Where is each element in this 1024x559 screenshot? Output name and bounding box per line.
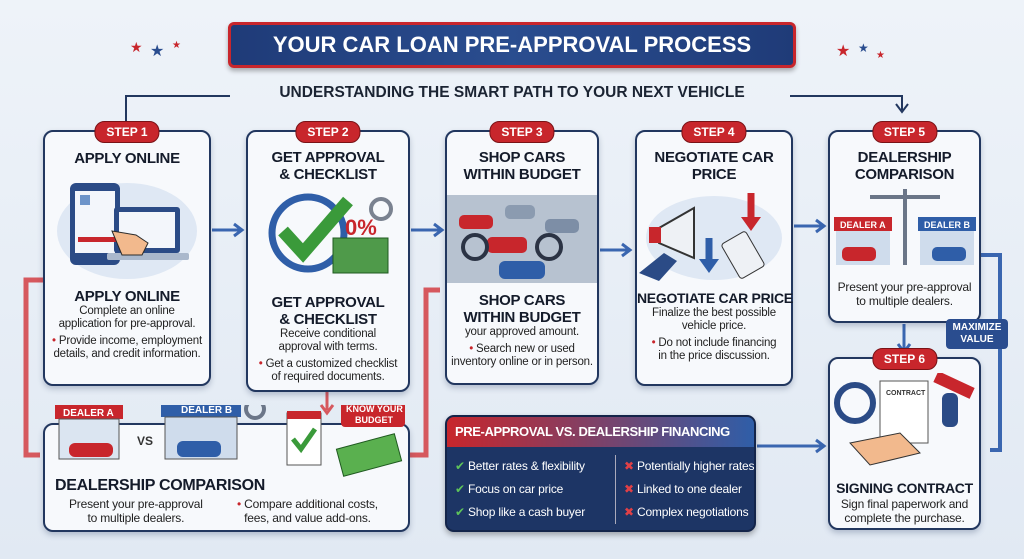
card: step 2: GET APPROVAL xyxy=(271,149,385,166)
card: step 1 xyxy=(43,130,211,386)
panel: dealership comparison bottom: Present your pre-approval xyxy=(69,497,203,511)
card: step 2: STEP 2 xyxy=(307,125,349,139)
card: step 3: your approved amount. xyxy=(465,326,579,338)
card: step 4: in the price discussion. xyxy=(658,350,770,362)
heading: PRE-APPROVAL VS. DEALERSHIP FINANCING xyxy=(455,424,730,439)
icon: car lot xyxy=(447,195,597,283)
card: step 6: Sign final paperwork and xyxy=(841,497,968,511)
card: step 4: NEGOTIATE CAR PRICE xyxy=(637,290,793,306)
decorative stars: ★ xyxy=(172,40,181,51)
title banner: YOUR CAR LOAN PRE-APPROVAL PROCESS xyxy=(273,32,751,57)
icon: checklist and cash: BUDGET xyxy=(355,415,394,425)
card: step 5: DEALERSHIP xyxy=(858,149,951,166)
card: step 5: COMPARISON xyxy=(855,166,954,183)
card: step 4: Finalize the best possible xyxy=(652,307,776,319)
card: step 2: approval with terms. xyxy=(279,341,377,353)
icon: checklist and cash xyxy=(286,405,405,477)
panel: dealership comparison bottom: fees, and value add-ons. xyxy=(244,511,371,525)
card: step 4: • Do not include financing xyxy=(652,337,776,349)
icon: scale and dealers: DEALER B xyxy=(924,220,971,230)
card: step 1: APPLY ONLINE xyxy=(74,288,180,305)
card: step 5: to multiple dealers. xyxy=(856,294,953,308)
decorative stars: ★ xyxy=(150,43,164,60)
card: step 1: Complete an online xyxy=(79,305,175,317)
callout: maximize value: VALUE xyxy=(960,334,994,345)
card: step 4: vehicle price. xyxy=(682,320,746,332)
card: step 3 xyxy=(445,130,599,385)
icon: dealers vs xyxy=(55,405,266,460)
card: step 1: APPLY ONLINE xyxy=(74,150,180,167)
card: step 2: & CHECKLIST xyxy=(279,311,377,328)
card: step 3: SHOP CARS xyxy=(479,149,565,166)
icon: contract handshake xyxy=(834,373,975,466)
list: pros: ✔ Shop like a cash buyer xyxy=(455,505,585,519)
icon: dealers vs: VS xyxy=(137,434,153,448)
panel: dealership comparison bottom: DEALERSHIP COMPARISON xyxy=(55,477,265,494)
card: step 1: STEP 1 xyxy=(106,125,148,139)
panel: dealership comparison bottom xyxy=(43,423,410,532)
icon: dealers vs: DEALER B xyxy=(181,405,232,416)
card: step 3: WITHIN BUDGET xyxy=(464,166,580,183)
card: step 6: STEP 6 xyxy=(884,352,925,366)
card: step 3: inventory online or in person. xyxy=(451,356,593,368)
list: cons: ✖ Linked to one dealer xyxy=(624,482,742,496)
card: step 5 xyxy=(828,130,981,323)
decorative stars: ★ xyxy=(858,41,869,55)
icon: contract handshake: CONTRACT xyxy=(886,390,926,397)
card: step 2: Receive conditional xyxy=(280,328,376,340)
card: step 3: • Search new or used xyxy=(469,343,575,355)
card: step 3: WITHIN BUDGET xyxy=(464,309,580,326)
icon: scale and dealers: DEALER A xyxy=(840,220,886,230)
card: step 2: GET APPROVAL xyxy=(271,294,385,311)
title banner xyxy=(228,22,796,68)
card: step 2 xyxy=(246,130,410,392)
decorative stars: ★ xyxy=(876,50,885,61)
card: step 2: & CHECKLIST xyxy=(279,166,377,183)
panel: pre-approval vs dealership financing xyxy=(445,415,756,532)
card: step 1: details, and credit information. xyxy=(53,348,200,360)
callout: maximize value: MAXIMIZE xyxy=(953,322,1001,333)
list: pros: ✔ Focus on car price xyxy=(455,482,563,496)
card: step 1: • Provide income, employment xyxy=(52,335,202,347)
card: step 5: Present your pre-approval xyxy=(838,280,971,294)
card: step 4: PRICE xyxy=(692,166,736,183)
card: step 2: of required documents. xyxy=(271,371,385,383)
panel: dealership comparison bottom: to multiple dealers. xyxy=(88,511,184,525)
subtitle: UNDERSTANDING THE SMART PATH TO YOUR NEXT VEHICLE xyxy=(279,84,745,101)
icon: devices xyxy=(57,183,197,279)
icon: checkmark and money xyxy=(268,194,393,274)
list: pros: ✔ Better rates & flexibility xyxy=(455,459,585,473)
list: cons: ✖ Potentially higher rates xyxy=(624,459,754,473)
card: step 6 xyxy=(828,357,981,530)
icon: megaphone and price tag xyxy=(639,193,782,281)
card: step 4: NEGOTIATE CAR xyxy=(654,149,774,166)
callout: maximize value xyxy=(946,319,1008,349)
icon: dealers vs: DEALER A xyxy=(63,408,114,419)
heading xyxy=(447,417,754,447)
list: cons xyxy=(615,455,754,524)
decorative stars: ★ xyxy=(836,43,850,60)
card: step 2: • Get a customized checklist xyxy=(259,358,397,370)
card: step 3: STEP 3 xyxy=(501,125,543,139)
icon: scale and dealers xyxy=(834,189,976,265)
icon: checkmark and money: 0% xyxy=(345,215,377,240)
card: step 3: SHOP CARS xyxy=(479,292,565,309)
list: cons: ✖ Complex negotiations xyxy=(624,505,748,519)
card: step 6: SIGNING CONTRACT xyxy=(836,480,973,496)
card: step 6: complete the purchase. xyxy=(844,511,965,525)
card: step 4: STEP 4 xyxy=(693,125,735,139)
decorative stars: ★ xyxy=(130,39,143,55)
list: pros xyxy=(455,459,586,519)
card: step 1: application for pre-approval. xyxy=(59,318,195,330)
card: step 4 xyxy=(635,130,793,386)
card: step 5: STEP 5 xyxy=(884,125,925,139)
panel: dealership comparison bottom: • Compare additional costs, xyxy=(237,497,378,511)
